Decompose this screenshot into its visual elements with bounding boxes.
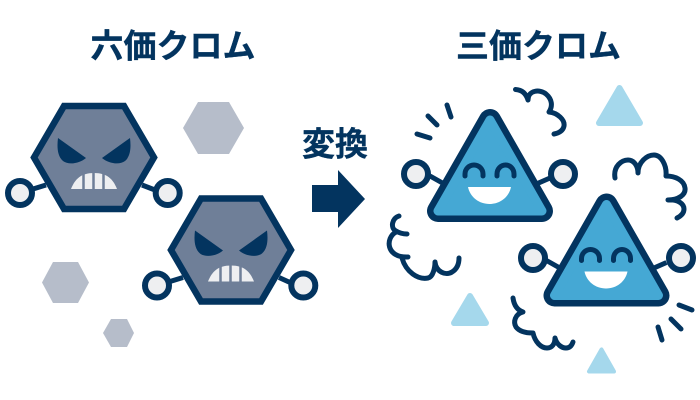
cloud bottom right: [513, 298, 573, 348]
background hexagon small: [103, 319, 134, 347]
background triangle top right: [599, 88, 640, 123]
background triangle bottom: [589, 350, 614, 372]
sparkle rays top left: [417, 105, 451, 138]
angry hexagon character 2: [145, 198, 315, 302]
background hexagon large: [183, 102, 244, 154]
label: conversion: 変換: [302, 126, 368, 162]
arrow: [312, 170, 365, 228]
angry hexagon character 1: [8, 106, 180, 209]
happy triangle character 1: [404, 120, 575, 211]
background triangle lower left: [454, 296, 486, 323]
title: hexavalent chromium: 六価クロム: [90, 28, 256, 64]
cloud top: [516, 90, 564, 134]
cloud right: [615, 155, 685, 218]
title: trivalent chromium: 三価クロム: [456, 28, 621, 64]
background hexagon medium: [42, 262, 89, 303]
happy triangle character 2: [521, 204, 693, 296]
sparkle rays bottom right: [658, 305, 692, 340]
cloud bottom left: [389, 216, 459, 278]
